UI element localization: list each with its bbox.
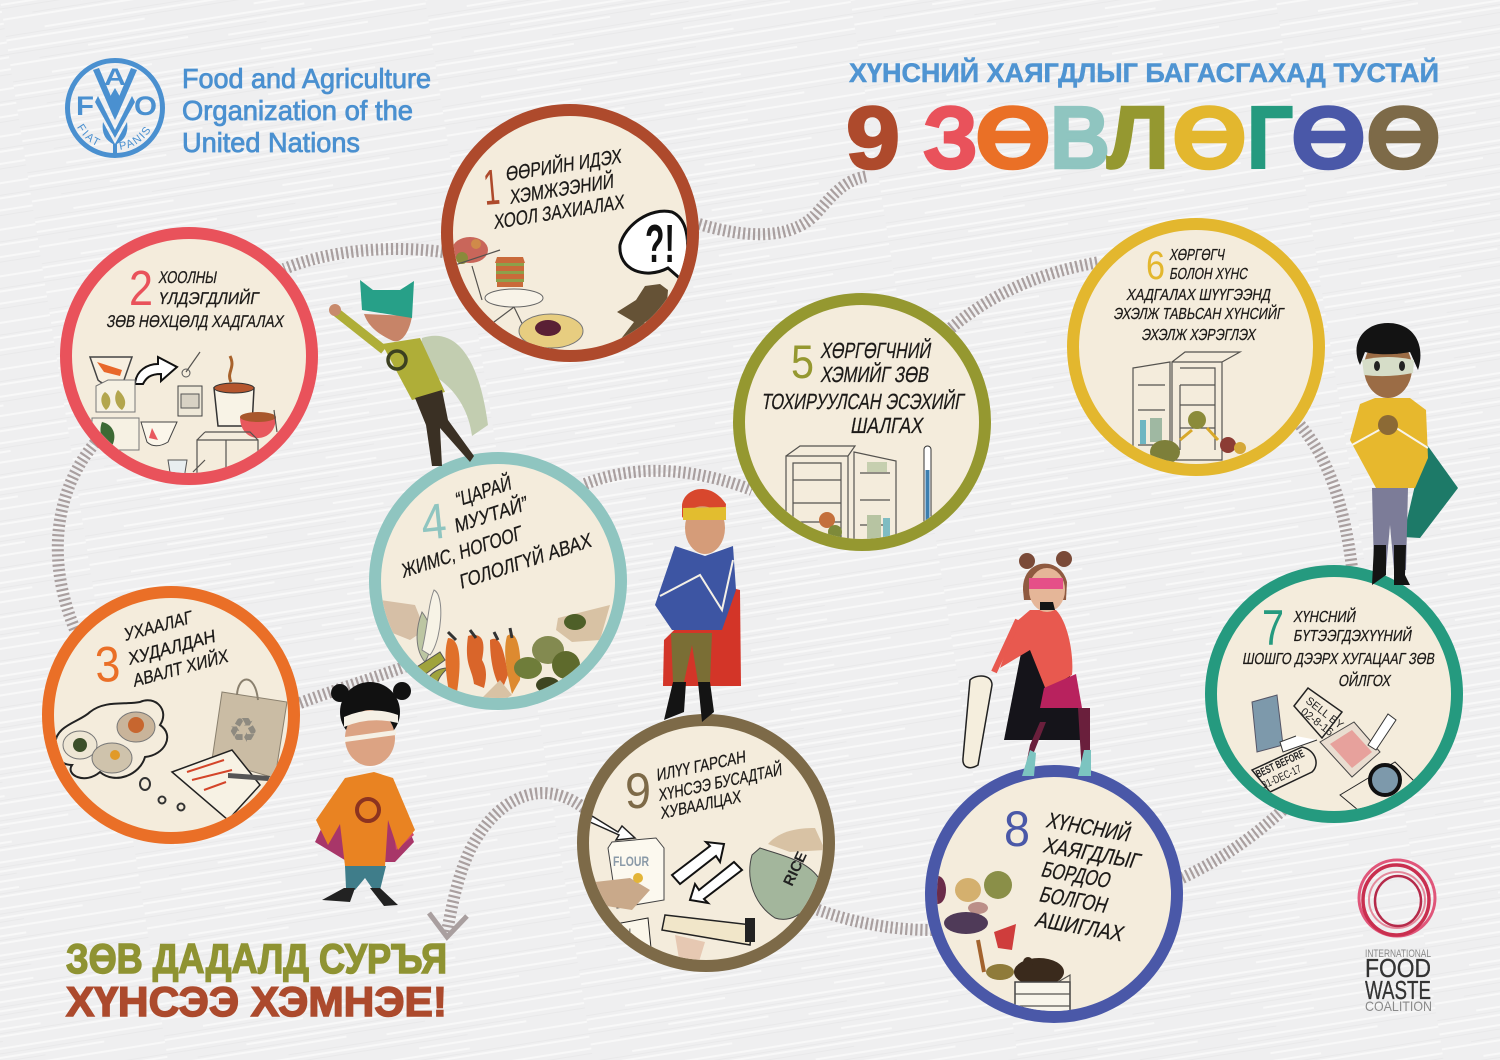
FAO emblem: O bbox=[134, 91, 157, 121]
FAO emblem bbox=[65, 58, 165, 158]
main title: В bbox=[1050, 88, 1110, 187]
illustration: restaurant food bbox=[452, 211, 688, 348]
number 6: 6 bbox=[1146, 244, 1165, 288]
tip 4 text: ЖИМС, НОГООГ bbox=[401, 522, 524, 583]
number 3: 3 bbox=[94, 636, 122, 693]
tip 1 text: ХООЛ ЗАХИАЛАХ bbox=[494, 191, 625, 234]
tip 9 bbox=[583, 720, 829, 966]
hero: skater girl bbox=[963, 551, 1091, 776]
tip 7 text: ШОШГО ДЭЭРХ ХУГАЦААГ ЗӨВ bbox=[1241, 650, 1436, 668]
tip 7 text: ОЙЛГОХ bbox=[1337, 671, 1393, 690]
tip 1 bbox=[447, 110, 693, 356]
tip 6 text: ЭХЭЛЖ ТАВЬСАН ХҮНСИЙГ bbox=[1112, 304, 1286, 323]
tip 3 text: ХУДАЛДАН bbox=[128, 626, 216, 669]
hero: orange girl bbox=[315, 682, 415, 906]
tip 4 text bbox=[401, 470, 593, 594]
tip 5 bbox=[739, 299, 985, 545]
subtitle: ХҮНСНИЙ ХАЯГДЛЫГ БАГАСГАХАД ТУСТАЙ bbox=[849, 57, 1439, 88]
FAO name: United Nations bbox=[182, 127, 360, 158]
main title: Ө bbox=[975, 88, 1051, 187]
tip 8 bbox=[930, 771, 1177, 1017]
tip 2 bbox=[66, 233, 312, 485]
main title: Ө bbox=[1172, 88, 1247, 187]
illustration: open fridge and thermometer bbox=[786, 446, 931, 545]
FAO emblem: A bbox=[104, 64, 126, 91]
tip 2 text bbox=[105, 267, 286, 331]
tip 5 text: ШАЛГАХ bbox=[849, 413, 926, 438]
illustration: storing leftovers bbox=[90, 352, 277, 485]
tip 5 text: ТОХИРУУЛСАН ЭСЭХИЙГ bbox=[760, 389, 967, 414]
tip 1 text: ХЭМЖЭЭНИЙ bbox=[510, 168, 614, 209]
tip 8 text: АШИГЛАХ bbox=[1032, 907, 1128, 946]
food waste coalition logo bbox=[1359, 860, 1435, 1014]
illustration: shopping list and bag bbox=[55, 679, 287, 820]
tip 4 text: “ЦАРАЙ bbox=[454, 470, 513, 512]
number 7: 7 bbox=[1262, 600, 1284, 656]
number 9: 9 bbox=[625, 763, 651, 819]
hero: green boy bbox=[329, 280, 488, 466]
tip 6 text: ЭХЭЛЖ ХЭРЭГЛЭХ bbox=[1140, 326, 1258, 344]
tip 4 text: ГОЛОЛГҮЙ АВАХ bbox=[458, 527, 593, 594]
tip 6 text: БОЛОН ХҮНС bbox=[1168, 265, 1250, 283]
FAO name bbox=[182, 63, 431, 158]
illustration: shopping list and bag: ♻ bbox=[228, 711, 258, 751]
illustration: date labels bbox=[1252, 688, 1418, 820]
illustration: date labels: 31-DEC-17 bbox=[1260, 763, 1303, 792]
FAO emblem: FIAT bbox=[77, 124, 100, 145]
main title bbox=[846, 88, 1441, 187]
illustration: restaurant food: ?! bbox=[645, 214, 675, 274]
number 4: 4 bbox=[418, 493, 449, 551]
main title: Л bbox=[1107, 88, 1169, 187]
tip 8 text: БОРДОО bbox=[1038, 857, 1115, 893]
tip 6 bbox=[1073, 224, 1319, 470]
illustration: fridge with arrows bbox=[1133, 352, 1246, 464]
tip 5 text: ХЭМИЙГ ЗӨВ bbox=[819, 362, 931, 387]
main title: 9 bbox=[846, 88, 900, 187]
illustration: date labels: BEST BEFORE bbox=[1254, 748, 1306, 781]
illustration: date labels: 02-8-16 bbox=[1298, 706, 1335, 739]
tip 9 text: ХҮНСЭЭ БУСАДТАЙ bbox=[658, 759, 782, 805]
tip 7 text: ХҮНСНИЙ bbox=[1292, 607, 1358, 626]
tip 3 text: АВАЛТ ХИЙХ bbox=[133, 645, 229, 691]
slogan: ХҮНСЭЭ ХЭМНЭЕ! bbox=[66, 978, 447, 1025]
logo wordmark: FOOD bbox=[1365, 953, 1431, 983]
tip 1 text bbox=[494, 143, 625, 234]
logo wordmark bbox=[1365, 948, 1432, 1014]
hero: blue boy bbox=[655, 489, 741, 722]
FAO emblem: PANIS bbox=[119, 127, 150, 150]
hero: yellow boy bbox=[1350, 323, 1458, 585]
main title: Ө bbox=[1291, 88, 1366, 187]
tip 9 text: ХУВААЛЦАХ bbox=[660, 786, 742, 823]
arrowhead of the path bbox=[429, 913, 467, 937]
illustration: sharing food: IN bbox=[622, 927, 631, 937]
slogan bbox=[66, 935, 447, 1025]
tip 2 text: ҮЛДЭГДЛИЙГ bbox=[157, 288, 261, 308]
tip 4 text: МУУТАЙ” bbox=[453, 491, 529, 538]
number 1: 1 bbox=[481, 159, 502, 216]
tip 6 text: ХАДГАЛАХ ШҮҮГЭЭНД bbox=[1125, 286, 1273, 304]
tip 3 text bbox=[124, 607, 229, 691]
slogan: ЗӨВ ДАДАЛД СУРЪЯ bbox=[66, 935, 447, 982]
tip 1 text: ӨӨРИЙН ИДЭХ bbox=[506, 143, 622, 186]
logo wordmark: INTERNATIONAL bbox=[1365, 948, 1431, 960]
main title: Г bbox=[1247, 88, 1293, 187]
tip 3 text: УХААЛАГ bbox=[124, 607, 193, 645]
main title: Ө bbox=[1366, 88, 1441, 187]
tip 4 bbox=[375, 458, 621, 705]
tip 7 text bbox=[1241, 607, 1436, 690]
tip 9 text bbox=[656, 746, 782, 823]
dashed path connecting the tips bbox=[58, 176, 1352, 932]
illustration: sharing food: FLOUR bbox=[613, 853, 649, 869]
tip 8 text: ХҮНСНИЙ bbox=[1043, 808, 1135, 846]
tip 3 bbox=[48, 592, 294, 838]
tip 6 text: ХӨРГӨГЧ bbox=[1168, 246, 1226, 264]
tip 7 bbox=[1211, 571, 1457, 820]
tip 6 text bbox=[1112, 246, 1286, 344]
tip 2 text: ЗӨВ НӨХЦӨЛД ХАДГАЛАХ bbox=[105, 311, 286, 331]
logo wordmark: COALITION bbox=[1365, 998, 1432, 1014]
tip 8 text bbox=[1032, 808, 1144, 946]
tip 5 text bbox=[760, 338, 967, 438]
illustration: imperfect vegetables bbox=[380, 590, 610, 705]
tip 8 text: БОЛГОН bbox=[1036, 882, 1112, 918]
number 8: 8 bbox=[1004, 801, 1030, 857]
tip 8 text: ХАЯГДЛЫГ bbox=[1040, 833, 1144, 874]
tip 2 text: ХООЛНЫ bbox=[157, 267, 219, 287]
tip 7 text: БҮТЭЭГДЭХҮҮНИЙ bbox=[1292, 626, 1414, 645]
illustration: compost bbox=[930, 871, 1070, 1014]
main title: З bbox=[923, 88, 978, 187]
illustration: date labels: SELL BY bbox=[1303, 695, 1346, 732]
FAO emblem: F bbox=[76, 91, 94, 121]
logo rings bbox=[1359, 860, 1435, 936]
FAO logo bbox=[65, 58, 431, 158]
illustration: sharing food: RICE bbox=[780, 849, 811, 889]
illustration: sharing food bbox=[590, 816, 825, 965]
number 5: 5 bbox=[791, 335, 814, 388]
logo wordmark: WASTE bbox=[1365, 975, 1431, 1005]
tip 5 text: ХӨРГӨГЧНИЙ bbox=[819, 338, 933, 363]
tip 9 text: ИЛҮҮ ГАРСАН bbox=[656, 746, 746, 785]
number 2: 2 bbox=[129, 262, 153, 316]
FAO name: Food and Agriculture bbox=[182, 63, 431, 94]
FAO name: Organization of the bbox=[182, 95, 413, 126]
